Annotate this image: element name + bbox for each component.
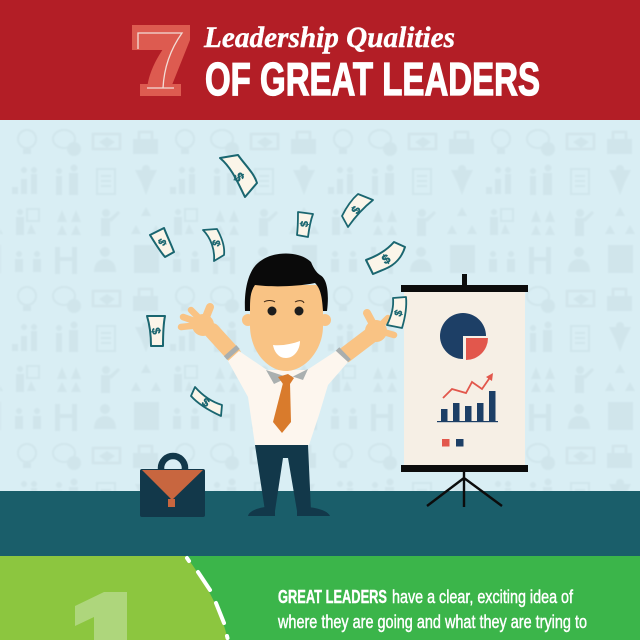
necktie [273, 374, 294, 433]
bill six [366, 242, 405, 274]
section one: green panel [0, 556, 640, 640]
businessman character [181, 253, 394, 516]
scene background with faint icon pattern [0, 120, 640, 491]
presentation board [401, 274, 528, 507]
bill five: $ [348, 203, 364, 216]
bill one: $ [230, 170, 248, 185]
bill four [297, 212, 313, 237]
section description text: have a clear, exciting idea of [392, 587, 574, 607]
shirt [228, 351, 348, 445]
bill seven [387, 297, 406, 328]
title line one: Leadership Qualities [203, 21, 455, 54]
bill four: $ [299, 221, 311, 228]
large number seven: 7 [136, 12, 186, 114]
bill two: $ [156, 237, 170, 248]
smile [273, 341, 300, 358]
briefcase icon [140, 456, 205, 517]
bill eight [147, 316, 165, 346]
section description text: GREAT LEADERS [278, 587, 387, 607]
chart legend squares [442, 439, 464, 446]
hair [245, 253, 328, 311]
eyes [268, 306, 276, 316]
bill one [220, 155, 257, 197]
right arm and hand [345, 313, 394, 355]
bill nine: $ [199, 395, 212, 410]
bill three [203, 229, 224, 261]
bill two [150, 228, 174, 257]
left arm and hand [181, 307, 233, 354]
bill eight: $ [149, 326, 164, 336]
bill three: $ [210, 239, 224, 248]
bar chart with trend arrow [437, 373, 498, 422]
flying money bills [147, 155, 406, 416]
collar [266, 369, 308, 384]
bill seven: $ [392, 308, 406, 318]
trousers and shoes [248, 445, 330, 516]
teal floor [0, 491, 640, 556]
bill nine [191, 387, 222, 416]
bill six: $ [379, 250, 394, 267]
head [242, 253, 331, 371]
header band [0, 0, 640, 120]
section number one [75, 592, 127, 640]
section description text [277, 587, 587, 632]
bill five [342, 194, 373, 227]
pie chart [440, 313, 488, 360]
light green circle with dashed edge [0, 556, 228, 640]
shirt cuffs [226, 347, 349, 361]
